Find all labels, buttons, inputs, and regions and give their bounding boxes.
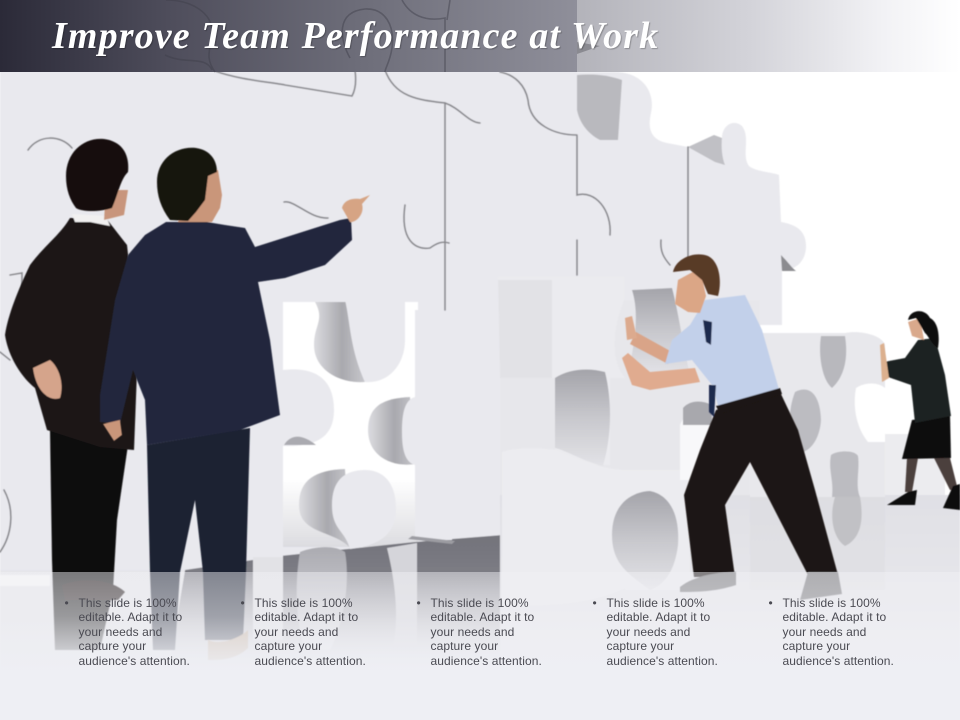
person: woman in black suit, pushing puzzle piece	[880, 311, 960, 510]
text block 3: capture your	[430, 639, 498, 653]
text block 4: This slide is 100%	[606, 596, 705, 610]
text: •	[64, 596, 69, 610]
text block 2: capture your	[254, 639, 322, 653]
text block 3: This slide is 100%	[430, 596, 529, 610]
text block 5	[768, 596, 894, 668]
text block 5: capture your	[782, 639, 850, 653]
text block 4: editable. Adapt it to	[606, 610, 710, 624]
bottom translucent panel	[0, 572, 960, 720]
title: Improve Team Performance at Work	[52, 15, 659, 57]
text block 1: This slide is 100%	[78, 596, 177, 610]
text block 3	[416, 596, 542, 668]
text block 1: audience's attention.	[78, 654, 190, 668]
text block 1: capture your	[78, 639, 146, 653]
gap between lower puzzle pieces	[283, 302, 418, 547]
piece faces and shadows	[577, 75, 622, 140]
text block 1	[64, 596, 190, 668]
text: •	[768, 596, 773, 610]
text block 2: This slide is 100%	[254, 596, 353, 610]
text block 5: editable. Adapt it to	[782, 610, 886, 624]
floor	[160, 535, 503, 720]
puzzle seam lines	[0, 58, 688, 552]
text block 4: audience's attention.	[606, 654, 718, 668]
reflections on floor	[297, 547, 347, 650]
text block 3: audience's attention.	[430, 654, 542, 668]
text block 2: your needs and	[254, 625, 338, 639]
text block 2: audience's attention.	[254, 654, 366, 668]
text block 1: editable. Adapt it to	[78, 610, 182, 624]
text: •	[240, 596, 245, 610]
text block 5: audience's attention.	[782, 654, 894, 668]
text block 3: editable. Adapt it to	[430, 610, 534, 624]
text: •	[416, 596, 421, 610]
text block 3: your needs and	[430, 625, 514, 639]
text block 4	[592, 596, 718, 668]
title banner	[0, 0, 960, 72]
text block 2: editable. Adapt it to	[254, 610, 358, 624]
person: man in black suit, back view	[5, 139, 138, 650]
text block 5: This slide is 100%	[782, 596, 881, 610]
text block 4: your needs and	[606, 625, 690, 639]
person: man in blue shirt, pushing puzzle piece	[622, 254, 842, 600]
person: man in navy suit, pointing	[100, 148, 370, 660]
text: •	[592, 596, 597, 610]
text block 2	[240, 596, 366, 668]
text block 4: capture your	[606, 639, 674, 653]
text block 1: your needs and	[78, 625, 162, 639]
text block 5: your needs and	[782, 625, 866, 639]
